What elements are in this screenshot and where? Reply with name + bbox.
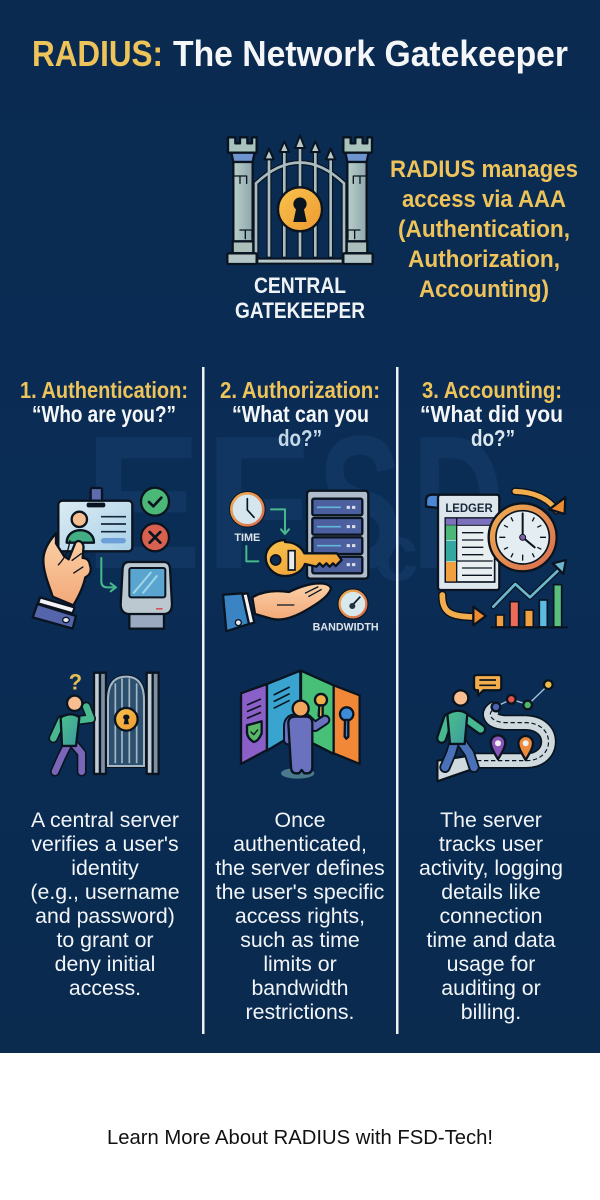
- faint FSD Tech watermark: [84, 397, 504, 609]
- title: The Network Gatekeeper: [173, 33, 568, 74]
- body: accounting: details like: [441, 880, 541, 904]
- central gatekeeper label: CENTRAL: [254, 273, 346, 298]
- heading: accounting: 3. Accounting:: [422, 377, 562, 403]
- AAA summary text: Authorization,: [408, 246, 560, 273]
- body: accounting: activity, logging: [419, 856, 563, 880]
- body: authorization: such as time: [240, 928, 360, 952]
- body: authorization: authenticated,: [233, 832, 367, 856]
- icon: person at locked gate: [53, 669, 159, 774]
- icon: ledger, clock and growth chart: [426, 491, 568, 627]
- title: RADIUS:: [32, 33, 163, 74]
- body: authorization: bandwidth: [251, 976, 349, 1000]
- body: authorization: limits or: [263, 952, 337, 976]
- heading: authorization: “What can you: [232, 401, 369, 427]
- faint FSD Tech watermark: F: [205, 397, 310, 609]
- heading: accounting: “What did you: [420, 401, 563, 427]
- column divider right: [396, 367, 398, 1034]
- body: authentication: access.: [69, 976, 141, 1000]
- body: accounting: time and data: [426, 928, 556, 952]
- faint FSD Tech watermark: D: [412, 397, 504, 609]
- panel: authorization: [215, 377, 385, 1024]
- central gatekeeper label: GATEKEEPER: [235, 298, 365, 323]
- footer call to action: Learn More About RADIUS with FSD-Tech!: [107, 1127, 493, 1149]
- AAA summary text: RADIUS manages: [390, 156, 578, 183]
- panel: accounting: [419, 377, 568, 1024]
- body: accounting: usage for: [447, 952, 535, 976]
- body: authorization: access rights,: [235, 904, 365, 928]
- body: accounting: auditing or: [441, 976, 541, 1000]
- body: authentication: to grant or: [56, 928, 154, 952]
- body: authentication: deny initial: [55, 952, 155, 976]
- body: accounting: billing.: [461, 1000, 521, 1024]
- AAA summary text: access via AAA: [402, 186, 566, 213]
- body: authorization: restrictions.: [246, 1000, 354, 1024]
- icon: clock, server rack, key, hand, gauge: TIME: [234, 532, 260, 544]
- icon: walker on tracked path: [437, 675, 553, 781]
- body: authentication: and password): [35, 904, 175, 928]
- column divider left: [202, 367, 204, 1034]
- faint FSD Tech watermark: c: [374, 508, 418, 597]
- body: accounting: connection: [439, 904, 543, 928]
- heading: authentication: “Who are you?”: [32, 401, 176, 427]
- AAA summary text: (Authentication,: [398, 216, 570, 243]
- heading: authentication: 1. Authentication:: [20, 377, 188, 403]
- icon: clock, server rack, key, hand, gauge: [223, 491, 379, 634]
- icon: central gatekeeper castle gate: [227, 135, 373, 264]
- body: authentication: verifies a user's: [31, 832, 179, 856]
- heading: authorization: do?”: [278, 425, 322, 451]
- body: authentication: (e.g., username: [30, 880, 180, 904]
- heading: accounting: do?”: [471, 425, 515, 451]
- faint FSD Tech watermark: E: [84, 397, 202, 609]
- panel: authentication: [20, 377, 188, 1000]
- body: authorization: the user's specific: [216, 880, 385, 904]
- icon: clock, server rack, key, hand, gauge: BANDWIDTH: [313, 622, 379, 634]
- body: authentication: A central server: [31, 808, 179, 832]
- body: authorization: Once: [275, 808, 325, 832]
- icon: ledger, clock and growth chart: LEDGER: [445, 501, 493, 515]
- body: accounting: tracks user: [439, 832, 543, 856]
- body: accounting: The server: [440, 808, 542, 832]
- icon: person viewing access map: [241, 671, 360, 779]
- AAA summary text: Accounting): [419, 276, 549, 303]
- heading: authorization: 2. Authorization:: [220, 377, 380, 403]
- faint FSD Tech watermark: S: [318, 397, 402, 609]
- body: authorization: the server defines: [215, 856, 385, 880]
- icon: ID badge and reader: [33, 488, 172, 629]
- icon: person at locked gate: ?: [69, 669, 82, 694]
- body: authentication: identity: [71, 856, 139, 880]
